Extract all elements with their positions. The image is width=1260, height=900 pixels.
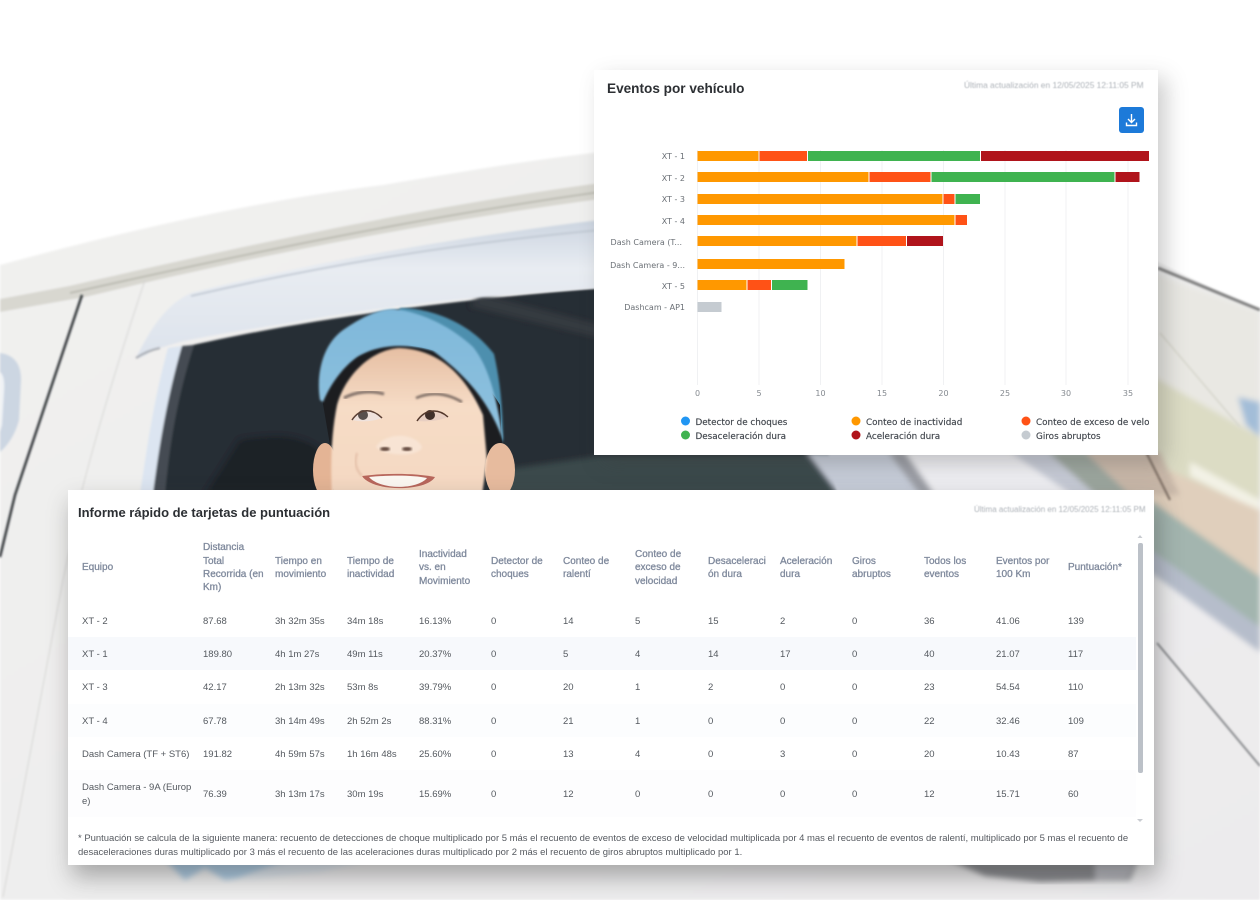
- value axis labels: 5: [756, 389, 762, 398]
- shirt and mirror seen below the table: [165, 860, 1138, 882]
- table row: XT - 4: XT - 4: [82, 716, 108, 727]
- table row: Dash Camera - 9A (Europe): 0: [780, 789, 785, 800]
- hair: [322, 345, 502, 460]
- table row: XT - 2: 15: [708, 616, 719, 627]
- table header: Giros abruptos: [852, 556, 891, 580]
- value axis labels: 35: [1123, 389, 1133, 398]
- table row: XT - 4: 67.78: [203, 716, 227, 727]
- table row: XT - 1: [68, 637, 1136, 670]
- table row: XT - 4: 109: [1068, 716, 1084, 727]
- bars: Dash Camera (TF + ST6): [698, 236, 943, 246]
- table row: XT - 4: 3h 14m 49s: [275, 716, 325, 727]
- table row: XT - 3: 54.54: [996, 682, 1020, 693]
- value axis labels: 30: [1061, 389, 1071, 398]
- table row: Dash Camera (TF + ST6): 4: [635, 749, 640, 760]
- table row: XT - 4: [68, 704, 1136, 737]
- icon: download button: [1119, 107, 1144, 133]
- table row: XT - 3: 2h 13m 32s: [275, 682, 325, 693]
- table row: XT - 2: 34m 18s: [347, 616, 383, 627]
- table row: XT - 1: 117: [1068, 649, 1083, 660]
- table header: Todos los eventos: [924, 556, 966, 580]
- table row: XT - 3: 110: [1068, 682, 1083, 693]
- table row: XT - 2: 41.06: [996, 616, 1020, 627]
- ears: [313, 443, 337, 497]
- table row: XT - 4: 0: [780, 716, 785, 727]
- table header: Inactividad vs. en Movimiento: [419, 549, 470, 587]
- table row: Dash Camera (TF + ST6): Dash Camera (TF + ST6): [82, 749, 189, 760]
- table row: XT - 3: 20: [563, 682, 574, 693]
- table row: XT - 3: XT - 3: [82, 682, 108, 693]
- table header: Detector de choques: [491, 556, 543, 580]
- bars: XT - 5: [698, 280, 808, 290]
- table header: Tiempo en movimiento: [275, 556, 326, 580]
- table row: XT - 1: 40: [924, 649, 935, 660]
- table row: Dash Camera (TF + ST6): 25.60%: [419, 749, 451, 760]
- table row: XT - 2: [82, 616, 1084, 627]
- vehicle axis labels: Dash Camera - 9...: [610, 261, 685, 270]
- legend: [681, 416, 1173, 442]
- bars: XT - 1: [698, 151, 1149, 161]
- bars: XT - 2: [698, 172, 1140, 182]
- table row: XT - 2: 139: [1068, 616, 1084, 627]
- table header: Aceleración dura: [780, 556, 832, 580]
- table row: XT - 2: 0: [491, 616, 496, 627]
- vehicle axis labels: XT - 2: [662, 174, 685, 183]
- table header: Eventos por 100 Km: [996, 556, 1049, 580]
- table row: Dash Camera - 9A (Europe): Dash Camera - 9A (Europ: [82, 782, 191, 793]
- table row: XT - 3: 42.17: [203, 682, 227, 693]
- stacked bar chart: events per vehicle: [610, 150, 1149, 442]
- table row: XT - 4: 0: [852, 716, 857, 727]
- table row: XT - 4: 32.46: [996, 716, 1020, 727]
- table row: Dash Camera (TF + ST6): 0: [708, 749, 713, 760]
- heading: informe rápido: Informe rápido de tarjetas de puntuación: [78, 505, 330, 520]
- bars: Dash Camera - 9A: [698, 259, 844, 269]
- legend: Aceleración dura: [866, 431, 940, 442]
- table row: XT - 2: 5: [635, 616, 640, 627]
- table row: Dash Camera - 9A (Europe): 15.69%: [419, 789, 451, 800]
- vehicle axis labels: XT - 1: [662, 152, 685, 161]
- heading: eventos por vehículo: Eventos por vehículo: [607, 81, 744, 96]
- table row: XT - 3: 39.79%: [419, 682, 451, 693]
- table row: XT - 2: 3h 32m 35s: [275, 616, 325, 627]
- table header: Conteo de ralentí: [563, 556, 609, 580]
- vehicle axis labels: XT - 3: [662, 195, 685, 204]
- table row: Dash Camera - 9A (Europe): 0: [708, 789, 713, 800]
- table row: XT - 1: 21.07: [996, 649, 1020, 660]
- bars: Dashcam - AP1: [698, 302, 722, 312]
- value axis labels: 25: [1000, 389, 1010, 398]
- door seam and side window: [0, 295, 82, 557]
- table row: XT - 3: [82, 682, 1083, 693]
- table row: XT - 3: 0: [491, 682, 496, 693]
- bars: XT - 3: [698, 194, 980, 204]
- nose: [376, 436, 422, 454]
- table header: Conteo de exceso de velocidad: [635, 549, 681, 587]
- value axis labels: 20: [938, 389, 949, 398]
- table row: Dash Camera (TF + ST6): [82, 749, 1079, 760]
- last updated timestamp: Última actualización en 12/05/2025 12:11:05 PM: [974, 505, 1146, 514]
- table row: Dash Camera (TF + ST6): 87: [1068, 749, 1079, 760]
- table row: Dash Camera (TF + ST6): 3: [780, 749, 785, 760]
- bars: XT - 4: [698, 215, 967, 225]
- table row: Dash Camera - 9A (Europe): 12: [563, 789, 574, 800]
- table row: Dash Camera - 9A (Europe): 12: [924, 789, 935, 800]
- table row: XT - 1: 189.80: [203, 649, 232, 660]
- table row: XT - 1: 0: [852, 649, 857, 660]
- table row: XT - 3: 23: [924, 682, 935, 693]
- legend: Giros abruptos: [1036, 432, 1101, 442]
- table row: XT - 1: 4h 1m 27s: [275, 649, 319, 660]
- table row: Dash Camera (TF + ST6): 191.82: [203, 749, 232, 760]
- table row: XT - 4: 2h 52m 2s: [347, 716, 391, 727]
- vehicle axis labels: Dash Camera (T...: [611, 238, 682, 247]
- table scrollbar: [1137, 535, 1143, 822]
- table row: XT - 2: 16.13%: [419, 616, 451, 627]
- footnote: * Puntuación se calcula de la siguiente manera: recuento de detecciones de choque multiplicado por 5 más el recuento de eventos de exceso de velocidad multiplicada por 4 mas el recuento de eventos de ralentí, multiplicado por 5 mas el recuento de desaceleraciones duras multiplicado por 3 más el recuento de las aceleraciones duras multiplicado por 2 más el recuento de giros abruptos multiplicado por 1.: [78, 833, 1128, 858]
- table row: XT - 4: 1: [635, 716, 640, 727]
- right side of the van, motion blur: [805, 272, 1260, 652]
- table row: Dash Camera (TF + ST6): 20: [924, 749, 935, 760]
- table row: XT - 1: 20.37%: [419, 649, 451, 660]
- eyes: [352, 411, 382, 421]
- table row: Dash Camera - 9A (Europe): 30m 19s: [347, 789, 383, 800]
- table row: Dash Camera - 9A (Europe): 0: [491, 789, 496, 800]
- table row: XT - 2: XT - 2: [82, 616, 108, 627]
- table row: XT - 3: 0: [852, 682, 857, 693]
- table header: Equipo: [82, 562, 113, 573]
- table row: Dash Camera (TF + ST6): 0: [852, 749, 857, 760]
- window interior: [140, 288, 838, 495]
- table row: XT - 4: 88.31%: [419, 716, 451, 727]
- table row: Dash Camera - 9A (Europe): 60: [1068, 789, 1079, 800]
- table row: XT - 1: 14: [708, 649, 719, 660]
- table row: XT - 3: 2: [708, 682, 713, 693]
- table row: XT - 2: 2: [780, 616, 785, 627]
- panel: informe rápido de tarjetas de puntuación: [68, 490, 1154, 865]
- eyebrows: [344, 392, 384, 398]
- table row: XT - 1: 0: [491, 649, 496, 660]
- table row: XT - 4: 22: [924, 716, 935, 727]
- cap crown: [393, 308, 503, 442]
- table row: Dash Camera - 9A (Europe): 0: [852, 789, 857, 800]
- table row: Dash Camera (TF + ST6): 13: [563, 749, 574, 760]
- table row: Dash Camera - 9A (Europe): [68, 770, 1136, 817]
- table row: Dash Camera - 9A (Europe): 76.39: [203, 789, 227, 800]
- vehicle axis labels: XT - 5: [662, 282, 685, 291]
- table row: XT - 4: 0: [708, 716, 713, 727]
- table row: XT - 2: 14: [563, 616, 574, 627]
- face: [331, 348, 487, 495]
- table row: Dash Camera (TF + ST6): 0: [491, 749, 496, 760]
- vehicle axis labels: Dashcam - AP1: [624, 303, 685, 312]
- table row: Dash Camera - 9A (Europe): 15.71: [996, 789, 1020, 800]
- table row: Dash Camera (TF + ST6): 4h 59m 57s: [275, 749, 325, 760]
- table row: XT - 1: 17: [780, 649, 791, 660]
- value axis labels: 10: [815, 389, 826, 398]
- table header: [82, 542, 1122, 593]
- driver: [313, 308, 515, 497]
- vehicle axis labels: [610, 152, 685, 312]
- table row: XT - 1: 5: [563, 649, 568, 660]
- table row: XT - 3: 1: [635, 682, 640, 693]
- cap brim: [319, 309, 503, 440]
- table row: XT - 3: 0: [780, 682, 785, 693]
- table row: XT - 4: 0: [491, 716, 496, 727]
- table header: Tiempo de inactividad: [347, 556, 394, 580]
- smile: [362, 474, 435, 488]
- table row: Dash Camera - 9A (Europe): 0: [635, 789, 640, 800]
- table header: Desaceleración dura: [708, 556, 766, 580]
- table row: XT - 2: 87.68: [203, 616, 227, 627]
- legend: Desaceleración dura: [696, 431, 786, 442]
- vehicle axis labels: XT - 4: [662, 217, 685, 226]
- table header: Puntuación*: [1068, 562, 1122, 573]
- table row: XT - 2: 36: [924, 616, 935, 627]
- value axis labels: [695, 389, 1133, 398]
- table row: Dash Camera (TF + ST6): 1h 16m 48s: [347, 749, 397, 760]
- legend: Detector de choques: [696, 418, 788, 428]
- table row: XT - 1: 4: [635, 649, 640, 660]
- table row: XT - 3: 53m 8s: [347, 682, 378, 693]
- last updated timestamp: Última actualización en 12/05/2025 12:11:05 PM: [964, 80, 1144, 90]
- panel: eventos por vehículo: [594, 70, 1158, 455]
- table row: XT - 1: 49m 11s: [347, 649, 383, 660]
- table row: Dash Camera - 9A (Europe): e): [82, 796, 90, 806]
- value axis labels: 15: [877, 389, 887, 398]
- table row: XT - 2: 0: [852, 616, 857, 627]
- legend: Conteo de inactividad: [866, 418, 962, 428]
- table row: Dash Camera (TF + ST6): 10.43: [996, 749, 1020, 760]
- table row: XT - 1: XT - 1: [82, 649, 108, 660]
- table row: Dash Camera - 9A (Europe): 3h 13m 17s: [275, 789, 325, 800]
- window visor: [136, 220, 600, 358]
- table row: XT - 4: 21: [563, 716, 574, 727]
- table header: Distancia Total Recorrida (en Km): [203, 542, 264, 593]
- value axis labels: 0: [695, 389, 700, 398]
